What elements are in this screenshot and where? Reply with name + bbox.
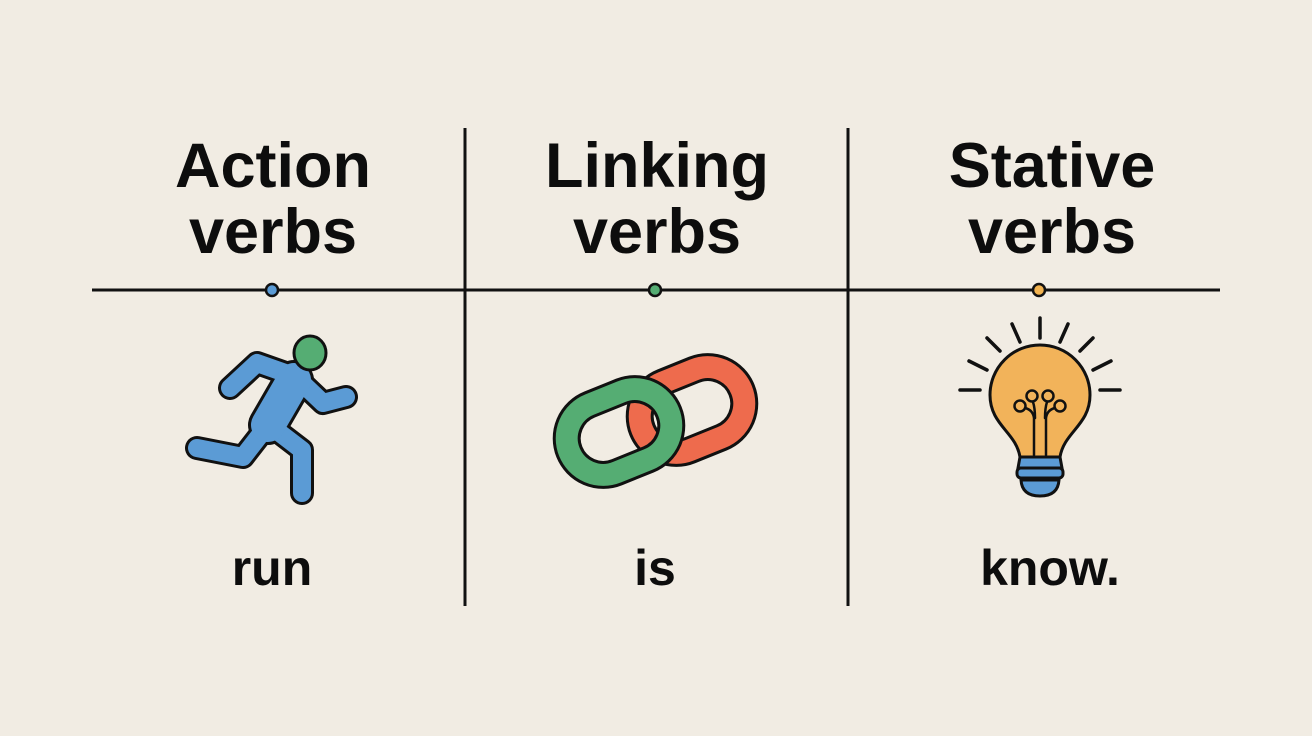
heading: linking verbs bbox=[545, 131, 769, 267]
example word: run: run bbox=[232, 540, 312, 596]
heading: linking verbs: Linking bbox=[545, 131, 769, 201]
heading: stative verbs bbox=[949, 131, 1155, 267]
example word: know.: know. bbox=[980, 540, 1120, 596]
marker dot: stative bbox=[1033, 284, 1045, 296]
heading: linking verbs: verbs bbox=[573, 197, 741, 267]
icon: chain links bbox=[556, 356, 755, 486]
heading: action verbs bbox=[175, 131, 371, 267]
heading: stative verbs: verbs bbox=[968, 197, 1136, 267]
marker dot: linking bbox=[649, 284, 661, 296]
icon: light bulb bbox=[960, 318, 1120, 496]
heading: action verbs: verbs bbox=[189, 197, 357, 267]
example word: is: is bbox=[634, 540, 676, 596]
marker dot: action bbox=[266, 284, 278, 296]
heading: stative verbs: Stative bbox=[949, 131, 1155, 201]
icon: running person bbox=[197, 336, 346, 493]
heading: action verbs: Action bbox=[175, 131, 371, 201]
